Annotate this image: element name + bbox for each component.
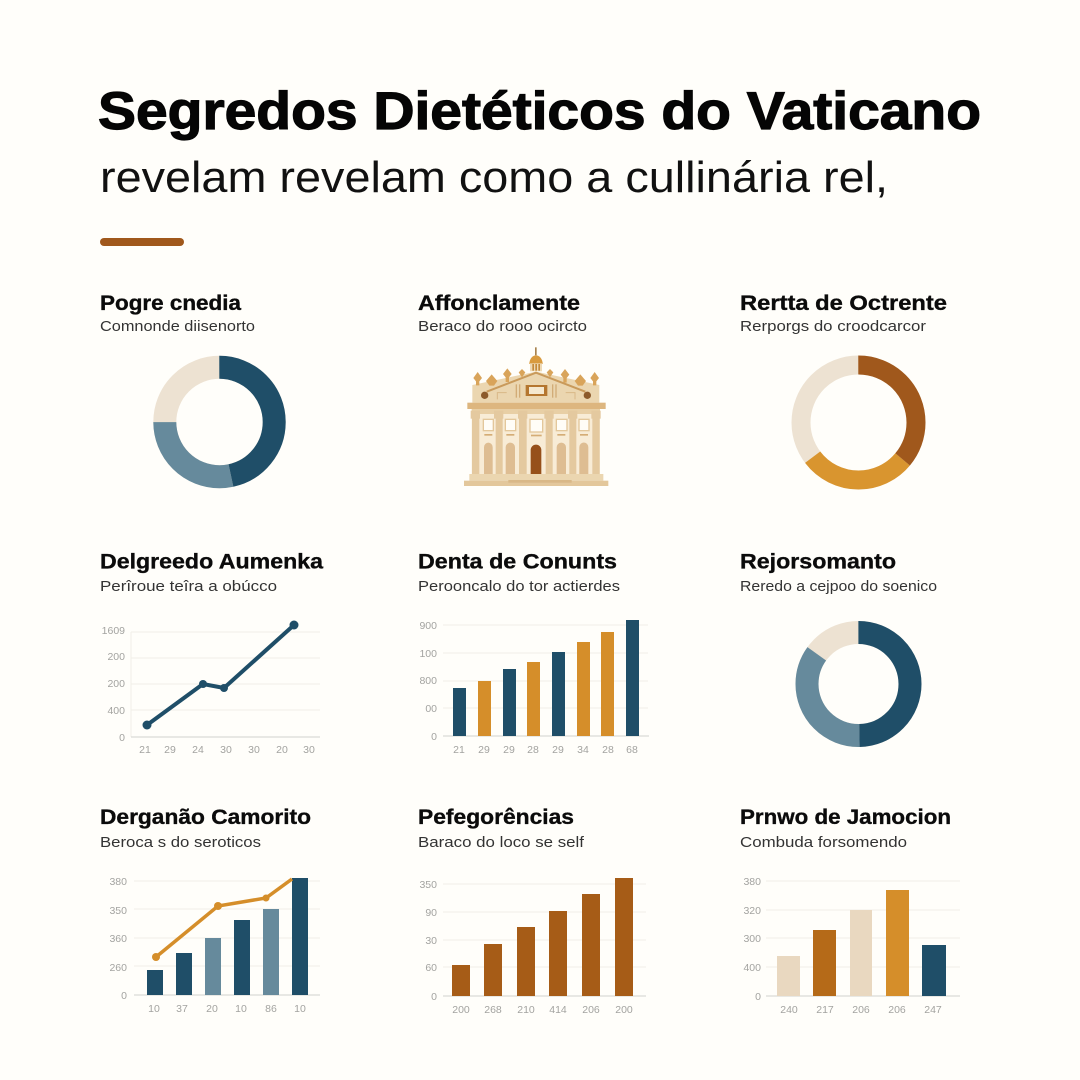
bar chart: 29 (503, 744, 515, 756)
bar chart: 60 (425, 962, 437, 974)
combo chart: 380 (109, 876, 127, 888)
line chart: 200 (107, 651, 125, 663)
heading: Rejorsomanto (740, 550, 896, 574)
bar chart: 217 (816, 1004, 834, 1016)
bar chart: 29 (552, 744, 564, 756)
bar chart: 800 (419, 675, 437, 687)
bar chart: 68 (626, 744, 638, 756)
combo chart: 260 (109, 962, 127, 974)
donut chart (807, 632, 910, 736)
description: Comnonde diisenorto (100, 318, 255, 335)
description: Perîroue teîra a obúcco (100, 578, 277, 595)
panel: Affonclamente (418, 292, 608, 486)
bar chart: 320 (743, 905, 761, 917)
combo chart: 10 (148, 1003, 160, 1015)
heading: Affonclamente (418, 292, 580, 315)
heading: Pogre cnedia (100, 292, 241, 315)
heading: Denta de Conunts (418, 550, 617, 574)
bar chart: 34 (577, 744, 589, 756)
panel: Derganão Camorito (100, 806, 320, 1015)
donut chart (801, 365, 916, 480)
bar chart: 268 (484, 1004, 502, 1016)
heading: Pefegorências (418, 806, 574, 829)
description: Combuda forsomendo (740, 834, 907, 851)
line chart: 21 (139, 744, 151, 756)
combo chart: 10 (235, 1003, 247, 1015)
description: Baraco do loco se self (418, 834, 585, 851)
combo chart: 0 (121, 990, 127, 1002)
bar chart: 200 (615, 1004, 633, 1016)
heading: Derganão Camorito (100, 806, 311, 829)
description: Reredo a cejpoo do soenico (740, 578, 937, 595)
panel: Denta de Conunts (418, 550, 649, 756)
bar chart: 380 (743, 876, 761, 888)
bar chart: 400 (743, 962, 761, 974)
bar chart: 90 (425, 907, 437, 919)
panel: Pogre cnedia (100, 292, 274, 477)
bar chart: 0 (431, 991, 437, 1003)
bar chart: 28 (527, 744, 539, 756)
description: Perooncalo do tor actierdes (418, 578, 620, 595)
icon: Vatican basilica (464, 347, 608, 486)
donut chart (165, 367, 274, 477)
bar chart: 28 (602, 744, 614, 756)
bar chart: 210 (517, 1004, 535, 1016)
bar chart (419, 878, 646, 1016)
bar chart (419, 620, 649, 756)
bar chart: 0 (431, 731, 437, 743)
bar chart: 300 (743, 933, 761, 945)
line chart: 20 (276, 744, 288, 756)
bar chart: 200 (452, 1004, 470, 1016)
combo chart: 37 (176, 1003, 188, 1015)
bar chart: 00 (425, 703, 437, 715)
line chart (102, 620, 320, 756)
bar chart (743, 876, 960, 1016)
description: Beraco do rooo ocircto (418, 318, 587, 335)
bar chart: 100 (419, 648, 437, 660)
combo chart: 10 (294, 1003, 306, 1015)
line chart: 30 (220, 744, 232, 756)
accent bar (100, 238, 184, 246)
panel: Pefegorências (418, 806, 646, 1016)
heading: Prnwo de Jamocion (740, 806, 951, 829)
line chart: 1609 (102, 625, 125, 637)
line chart: 29 (164, 744, 176, 756)
line chart: 30 (248, 744, 260, 756)
bar chart: 414 (549, 1004, 567, 1016)
line chart: 400 (107, 705, 125, 717)
panel: Rertta de Octrente (740, 292, 947, 480)
bar chart: 21 (453, 744, 465, 756)
panel: Delgreedo Aumenka (100, 550, 323, 756)
combo chart: 360 (109, 933, 127, 945)
bar chart: 900 (419, 620, 437, 632)
line chart: 30 (303, 744, 315, 756)
title: Segredos Dietéticos do Vaticano (98, 82, 981, 141)
bar chart: 29 (478, 744, 490, 756)
line chart: 0 (119, 732, 125, 744)
heading: Delgreedo Aumenka (100, 550, 323, 574)
bar chart: 206 (852, 1004, 870, 1016)
combo chart: 20 (206, 1003, 218, 1015)
subtitle: revelam revelam como a cullinária rel, (100, 153, 888, 202)
panel: Prnwo de Jamocion (740, 806, 960, 1016)
combo chart (109, 876, 320, 1015)
bar chart: 247 (924, 1004, 942, 1016)
bar chart: 206 (582, 1004, 600, 1016)
panel: Rejorsomanto (740, 550, 937, 736)
description: Rerporgs do croodcarcor (740, 318, 926, 335)
combo chart: 350 (109, 905, 127, 917)
description: Beroca s do seroticos (100, 834, 261, 851)
heading: Rertta de Octrente (740, 292, 947, 315)
bar chart: 350 (419, 879, 437, 891)
bar chart: 240 (780, 1004, 798, 1016)
line chart: 24 (192, 744, 204, 756)
bar chart: 206 (888, 1004, 906, 1016)
bar chart: 30 (425, 935, 437, 947)
combo chart: 86 (265, 1003, 277, 1015)
line chart: 200 (107, 678, 125, 690)
bar chart: 0 (755, 991, 761, 1003)
